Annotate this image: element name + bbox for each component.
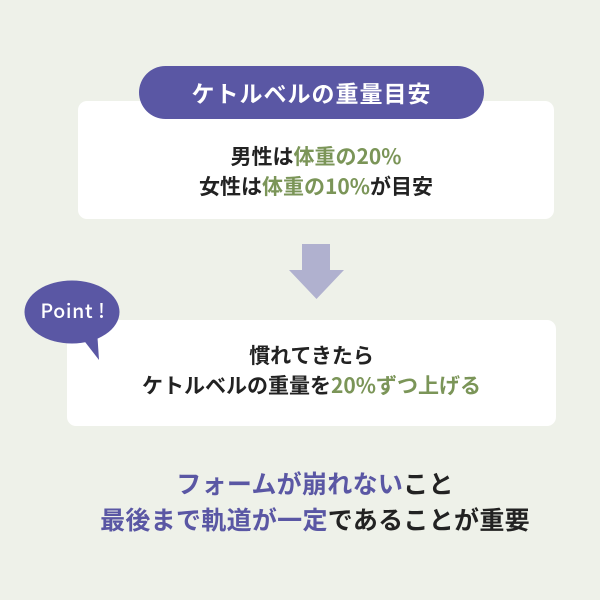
- heading pill: [139, 66, 484, 119]
- progression text: [142, 340, 481, 400]
- callout: Point bubble: [24, 280, 120, 360]
- conclusion text: フォームが崩れないこと: [176, 465, 454, 501]
- callout label: Point !: [41, 295, 105, 324]
- progression text: 慣れてきたら: [249, 340, 374, 370]
- progression text: ケトルベルの重量を20%ずつ上げる: [142, 370, 481, 400]
- guideline text: 男性は体重の20%: [230, 141, 402, 171]
- guideline text: 女性は体重の10%が目安: [199, 171, 433, 201]
- heading pill: ケトルベルの重量目安: [192, 75, 432, 109]
- arrow: down: [289, 244, 344, 299]
- panel: progression card: [67, 320, 556, 426]
- conclusion text: 最後まで軌道が一定であることが重要: [100, 501, 530, 537]
- guideline text: [199, 141, 433, 201]
- panel: weight guideline card: [78, 101, 554, 219]
- conclusion text: [100, 465, 530, 537]
